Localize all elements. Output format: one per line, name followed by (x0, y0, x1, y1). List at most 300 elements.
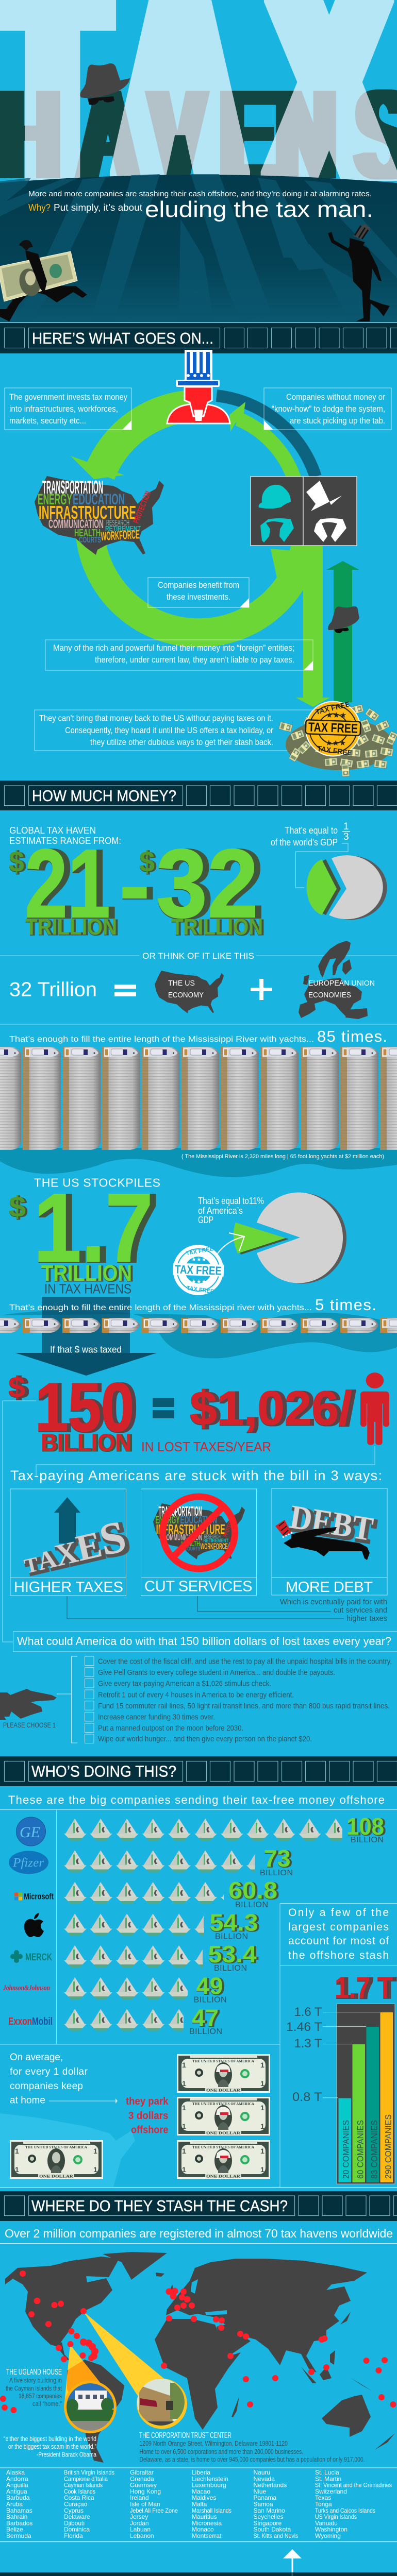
map: US infrastructure word cloud: RETIREMENT (105, 524, 141, 533)
map: small word cloud: INFRASTRUCTURE (156, 1522, 225, 1537)
bar chart: cash by number of companies: 83 COMPANIES (370, 2120, 379, 2179)
map: US economy (155, 971, 224, 1013)
text: 5 times yachts: 5 times. (315, 1296, 376, 1314)
text: 85 times yachts (9, 1027, 387, 1045)
column 3: Labuan (130, 2526, 151, 2533)
icon: Uncle Sam (167, 350, 230, 423)
column 6: Texas (315, 2494, 331, 2501)
icon: red person (360, 1372, 389, 1445)
text: three dollars offshore: offshore (131, 2125, 168, 2136)
text: one third of world GDP: That’s equal to (285, 825, 338, 836)
logo: Merck (10, 1950, 52, 1963)
dark green arrow: money going up (326, 561, 359, 702)
column 4: Mauritius (192, 2513, 217, 2520)
stamp: tax free white: TAX FREE (186, 1285, 214, 1295)
column 6 (315, 2469, 392, 2539)
map: European Union (299, 941, 375, 1019)
intro text: Why? (28, 202, 51, 213)
map: small word cloud: PROTECTION (222, 1513, 237, 1538)
column 6: Wyoming (315, 2532, 341, 2539)
bar chart: cash by number of companies: 290 COMPANIES (384, 2114, 393, 2179)
text: one dollar at home (10, 2052, 88, 2106)
text: three dollars offshore: they park (126, 2096, 169, 2107)
logo: ExxonMobil: ExxonMobil (8, 2016, 53, 2027)
text: few largest companies: Only a few of the (288, 1907, 389, 1919)
text: Corporation Trust Center: 1209 North Orange Street, Wilmington, Delaware 19801-1120 (139, 2439, 288, 2447)
text: one dollar at home: for every 1 dollar (10, 2066, 88, 2077)
text: 11 percent (198, 1196, 264, 1225)
checklist: Wipe out world hunger... and then give every person on the planet $20. (98, 1735, 312, 1743)
row: Merck (64, 1945, 259, 1971)
heading: HERE’S WHAT GOES ON... (32, 329, 213, 347)
map: US infrastructure word cloud: ENERGY (38, 491, 72, 508)
note: Mississippi assumptions: ( The Mississippi River is 2,320 miles long | 65 foot long yachts at $2 million each) (181, 1154, 384, 1160)
list: tax havens (6, 2469, 392, 2539)
map: US infrastructure word cloud (35, 476, 164, 555)
water band lower (0, 1311, 397, 1359)
equals sign (114, 985, 136, 996)
quote: Obama: “either the biggest building in the world (4, 2435, 96, 2443)
column 2: Costa Rica (64, 2494, 94, 2501)
question box: What could America do with that 150 billion dollars of lost taxes every year? (17, 1635, 391, 1648)
row: ExxonMobil (64, 2009, 222, 2034)
note: eventually paid for (67, 1596, 387, 1623)
logo: Merck: MERCK (25, 1952, 52, 1963)
company logos (3, 1817, 54, 2027)
callout: government invests (5, 388, 131, 430)
column 5: Samoa (254, 2501, 273, 2508)
row: GE: BILLION (351, 1836, 384, 1844)
logo: GE: GE (20, 1824, 40, 1841)
bar chart: cash by number of companies: 20 COMPANIES (341, 2120, 351, 2179)
panel: more debt: DEBT (287, 1498, 376, 1548)
note: eventually paid for: cut services and (334, 1606, 387, 1615)
column 6: Switzerland (315, 2488, 347, 2495)
green ring: companies benefit (90, 512, 323, 633)
connector lines (3, 1401, 375, 1642)
logo: GE (16, 1817, 45, 1846)
column 4: Maldives (192, 2494, 216, 2501)
subheading: big companies: These are the big companies sending their tax-free money offshore (8, 1793, 385, 1806)
text: three dollars offshore: 3 dollars (128, 2110, 168, 2122)
checklist (85, 1656, 392, 1743)
bar chart: cash by number of companies (286, 1971, 395, 2184)
panel: higher taxes: TAXES (18, 1511, 130, 1584)
panel: cut services (141, 1489, 257, 1596)
big number: 21 to 32 trillion: TRILLION (25, 914, 117, 940)
logo: Pfizer (9, 1851, 48, 1874)
illustration: columns of yachts (0, 1047, 397, 1150)
intro text: Put simply, it’s about (54, 202, 142, 213)
column 6: St. Lucia (315, 2469, 339, 2476)
big number: 150 billion per person: $1,026/ (190, 1381, 352, 1435)
icon: prohibited sign (163, 1497, 235, 1569)
text: 5 times yachts: That’s enough to fill the entire length of the Mississippi river with yachts... (9, 1303, 312, 1312)
column 2: Delaware (64, 2513, 90, 2520)
panel: higher taxes (10, 1489, 130, 1596)
stamp: tax free yellow (305, 700, 361, 757)
row: Pfizer: BILLION (260, 1869, 293, 1877)
callout: rich and powerful: therefore, under current law, they aren’t liable to pay taxes. (95, 655, 294, 665)
text: one dollar at home: On average, (10, 2052, 63, 2063)
text: few largest companies: the offshore stash (288, 1950, 389, 1961)
stamp: tax free yellow: ★★★ (325, 739, 346, 748)
column 3: Lebanon (130, 2532, 154, 2539)
text: one third of world GDP (271, 821, 350, 888)
bar chart: cash by number of companies: 60 COMPANIES (356, 2120, 366, 2179)
big number: 150 billion per person: $ (8, 1371, 25, 1404)
section banner: here's what goes on (0, 323, 397, 353)
column 5: St. Kitts and Nevis (254, 2532, 298, 2539)
continents (5, 2252, 395, 2463)
map: US economy: ECONOMY (168, 991, 204, 999)
icon: hard hat (259, 485, 291, 509)
text: one third of world GDP: of the world’s GDP (271, 837, 338, 848)
quote: Obama: or the biggest tax scam in the world.” (8, 2443, 96, 2450)
callout: government invests: The government invests tax money (9, 392, 127, 402)
text: global estimates: ESTIMATES RANGE FROM: (9, 836, 121, 846)
column 5: San Marino (254, 2507, 285, 2514)
column 1: Barbados (6, 2519, 32, 2527)
text: few largest companies: largest companies (288, 1921, 389, 1933)
map: US infrastructure word cloud: EDUCATION (73, 491, 125, 508)
logo: Pfizer: Pfizer (12, 1856, 44, 1870)
column 6: Tonga (315, 2501, 332, 2508)
intro text: More and more companies are stashing their cash offshore, and they’re doing it at alarming rates. (28, 190, 372, 198)
column 5: Niue (254, 2488, 267, 2495)
column 4: Micronesia (192, 2519, 222, 2527)
big number: 150 billion per person: IN LOST TAXES/YEAR (141, 1439, 271, 1454)
column 4 (192, 2469, 231, 2539)
label: please choose (3, 1656, 77, 1743)
equals sign (153, 1398, 174, 1418)
text: Ugland House: THE UGLAND HOUSE (6, 2368, 62, 2377)
section banner: how do they do it (0, 2572, 397, 2576)
column 1: Aruba (6, 2501, 23, 2508)
arrow: pick a haven points above (230, 2549, 302, 2576)
map: US infrastructure word cloud: PROTECTION (132, 490, 153, 524)
row: GE: 108 (346, 1813, 384, 1840)
big number: 1.7 trillion: TRILLION (41, 1261, 132, 1286)
panel: cut services: CUT SERVICES (144, 1579, 253, 1595)
bar chart: cash by number of companies: 0.8 T (292, 2090, 322, 2104)
map: world with tax havens (0, 2252, 396, 2463)
illustration: three offshore dollars (177, 2054, 270, 2179)
callout: hoard money (35, 710, 313, 751)
text: Ugland House: A five story building in (9, 2377, 62, 2384)
icon: worker collar (260, 518, 294, 543)
map: small word cloud: RETIREMENT (203, 1538, 228, 1544)
stamp: tax free white: TAX FREE (175, 1262, 222, 1278)
column 6: St. Martin (315, 2475, 341, 2482)
text: the US stockpiles: THE US STOCKPILES (34, 1176, 160, 1189)
column 4: Liechtenstein (192, 2475, 228, 2482)
subheading: over 2 million: Over 2 million companies are registered in almost 70 tax havens worldwide (5, 2227, 393, 2240)
stamp: tax free white: TAX FREE (186, 1246, 214, 1257)
column 1: Belize (6, 2526, 23, 2533)
pie chart: 11 percent of GDP (234, 1192, 346, 1284)
equation: 32 trillion equals US plus EU (9, 941, 375, 1019)
hero: headline TAX HAVENS (0, 0, 397, 323)
row: Merck: 53.4 (208, 1941, 257, 1968)
water band upper (0, 1148, 397, 1177)
map: US infrastructure word cloud: HEALTH (74, 528, 101, 539)
plus sign (251, 979, 272, 1000)
green arrow: government invests (71, 406, 192, 479)
intro text (28, 190, 373, 222)
column 5: Panama (254, 2494, 277, 2501)
row: Apple (64, 1913, 259, 1939)
icon: pointing hand (0, 1689, 57, 1720)
column 2: Djibouti (64, 2519, 85, 2527)
pie chart: one third (307, 855, 387, 920)
map: European Union: EUROPEAN UNION (308, 979, 375, 988)
column 3 (130, 2469, 178, 2539)
column 3: Guernsey (130, 2482, 157, 2489)
map: small word cloud: EDUCATION (180, 1514, 217, 1526)
column 1: Antigua (6, 2488, 27, 2495)
column 4: Liberia (192, 2469, 210, 2476)
callout: rich and powerful: Many of the rich and powerful funnel their money into “foreign” entities; (53, 643, 294, 653)
column 3: Jordan (130, 2519, 149, 2527)
callout: hoard money: Consequently, they hoard it until the US offers a tax holiday, or (65, 725, 273, 735)
logo: Microsoft: Microsoft (24, 1892, 54, 1902)
green arrow: money funnel down (296, 546, 330, 707)
text: global estimates (9, 825, 121, 846)
big number: 21 to 32 trillion: 21 (25, 829, 110, 938)
section banner: how much money (0, 781, 397, 810)
text: one third of world GDP: 1 (343, 821, 349, 832)
logo: Apple (24, 1913, 44, 1937)
checklist: Put a manned outpost on the moon before 2030. (98, 1724, 243, 1733)
callout: Corporation Trust Center (85, 2313, 187, 2429)
text: one dollar at home: at home (10, 2095, 45, 2106)
big number: 21 to 32 trillion: $ (9, 845, 24, 878)
illustration: yacht row (0, 1318, 397, 1333)
panel: more debt: MORE DEBT (286, 1579, 373, 1596)
column 6: Vanuatu (315, 2519, 338, 2527)
column 5: Singapore (254, 2519, 282, 2527)
chart: dollar boats by company (64, 1813, 384, 2036)
equation: 32 trillion equals US plus EU: 32 Trillion (9, 979, 97, 1001)
icon: white collar (314, 518, 346, 542)
dark back arc (80, 396, 316, 515)
big number: 150 billion per person: 150 (35, 1369, 134, 1446)
column 4: Marshall Islands (192, 2507, 231, 2514)
bar chart: cash by number of companies: 1.6 T (294, 2005, 322, 2019)
column 6: Turks and Caicos Islands (315, 2507, 375, 2514)
heading: HOW MUCH MONEY? (32, 787, 176, 805)
intro text: eluding the tax man. (145, 197, 373, 222)
heading: WHERE DO THEY STASH THE CASH? (31, 2197, 288, 2215)
quote: Obama (4, 2435, 97, 2459)
column 1: Alaska (6, 2469, 25, 2476)
callout: hoard money: they utilize other dubious ways to get their stash back. (90, 737, 273, 747)
row: Johnson and Johnson (64, 1977, 226, 2002)
column 3: Isle of Man (130, 2501, 160, 2508)
map: small word cloud: WORKFORCE (201, 1541, 228, 1551)
inner seas (191, 2279, 227, 2315)
big number: 21 to 32 trillion: 32 (156, 829, 258, 938)
column 4: Montserrat (192, 2532, 222, 2539)
callout: hoard money: They can’t bring that money back to the US without paying taxes on it. (39, 713, 273, 723)
text: few largest companies: account for most of (288, 1935, 389, 1947)
big number: 1.7 trillion: IN TAX HAVENS (44, 1281, 131, 1297)
big number: 21 to 32 trillion: TRILLION (171, 914, 263, 940)
bar chart: cash by number of companies: 1.3 T (294, 2037, 322, 2050)
row: Apple: BILLION (215, 1932, 248, 1941)
column 1: Bahrain (6, 2513, 27, 2520)
row: Microsoft (64, 1882, 278, 1907)
callout: companies benefit (148, 578, 249, 607)
column 5: Netherlands (254, 2482, 287, 2489)
checklist: Give Pell Grants to every college student in America... and double the payouts. (98, 1668, 335, 1677)
map: US economy: THE US (168, 979, 195, 988)
note: eventually paid for: Which is eventually paid for with (280, 1598, 387, 1606)
icon: top hat (306, 481, 342, 511)
ghost map behind bills (0, 2113, 135, 2187)
big number: 21 to 32 trillion: - (119, 830, 151, 939)
note: eventually paid for: higher taxes (346, 1614, 387, 1623)
column 3: Jebel Ali Free Zone (130, 2507, 178, 2514)
text: Ugland House: 18,857 companies (19, 2392, 62, 2400)
row: ExxonMobil: 47 (192, 2004, 219, 2031)
diagram: the tax cycle (5, 350, 397, 777)
column 1: Bermuda (6, 2532, 31, 2539)
callout: companies without money: Companies without money or (286, 392, 385, 402)
text: one third of world GDP: 3 (343, 832, 349, 842)
text: 11 percent: That’s equal to11% (198, 1196, 264, 1206)
stamp: tax free white (173, 1245, 224, 1295)
map: small word cloud: TRANSPORTATION (159, 1504, 202, 1519)
stamp: tax free white: ★★★ (191, 1279, 207, 1285)
section banner: where do they stash the cash (0, 2191, 397, 2221)
map: small word cloud: COURTS (185, 1546, 201, 1552)
row: Pfizer (64, 1850, 292, 1875)
row: Johnson and Johnson: BILLION (194, 1996, 227, 2005)
stamp: tax free yellow: TAX FREE (308, 720, 358, 736)
callout: government invests: into infrastructures, workforces, (9, 404, 118, 414)
big number: 150 billion per person (8, 1369, 352, 1456)
text: Ugland House: call “home.” (32, 2400, 62, 2408)
text: one dollar at home: companies keep (10, 2081, 83, 2092)
column 4: Macao (192, 2488, 210, 2495)
column 2 (64, 2469, 114, 2539)
row: GE (64, 1818, 386, 1842)
logo: Microsoft (14, 1892, 54, 1902)
big number: 150 billion per person: BILLION (41, 1429, 131, 1456)
row: Microsoft: BILLION (235, 1901, 268, 1909)
ground with letter reflections (0, 174, 397, 323)
checklist: Retrofit 1 out of every 4 houses in America to be energy efficient. (98, 1690, 294, 1699)
illustration: Uncle Sam silhouette (328, 224, 390, 321)
column 4: Malta (192, 2501, 207, 2508)
checklist: Give every tax-paying American a $1,026 stimulus check. (98, 1680, 271, 1688)
map: European Union: ECONOMIES (308, 991, 351, 999)
column 2: Curaçao (64, 2501, 88, 2508)
text: Ugland House (6, 2368, 62, 2408)
row: Microsoft: 60.8 (228, 1877, 277, 1904)
map: US infrastructure word cloud: WORKFORCE (101, 528, 140, 544)
column 2: Campione d’Italia (64, 2475, 108, 2482)
green arrow: companies pay (229, 402, 296, 484)
map: small word cloud: HEALTH (181, 1540, 200, 1548)
illustration: dollar at home (10, 2140, 103, 2179)
big number: 1.7 trillion: $ (9, 1191, 26, 1224)
text: stuck with the bill: Tax-paying Americans are stuck with the bill in 3 ways: (10, 1468, 382, 1483)
callout: rich and powerful (45, 640, 313, 670)
column 1: Andorra (6, 2475, 28, 2482)
column 5: South Dakota (254, 2526, 291, 2533)
column 4: Luxembourg (192, 2482, 226, 2489)
row: Merck: BILLION (214, 1964, 247, 1973)
row: Pfizer: 73 (264, 1845, 291, 1872)
heading: WHO’S DOING THIS? (31, 1762, 176, 1781)
big number: 1.7 trillion: 1.7 (34, 1174, 153, 1282)
column 3: Gibraltar (130, 2469, 154, 2476)
column 5: Nauru (254, 2469, 270, 2476)
text: Ugland House: the Cayman Islands that (6, 2384, 62, 2392)
big number: 21 to 32 trillion (9, 829, 263, 940)
map: small word cloud: ENERGY (155, 1514, 180, 1526)
arrow: home to offshore (49, 2098, 118, 2104)
column 3: Grenada (130, 2475, 154, 2482)
text: 5 times yachts (9, 1296, 376, 1314)
text: three dollars offshore (126, 2096, 169, 2136)
stamp: tax free yellow: TAX FREE (317, 744, 353, 757)
question box (13, 1632, 397, 1652)
callout: companies without money: are stuck picking up the tab. (290, 416, 385, 426)
icon: spy hat (328, 606, 359, 633)
column 3: Ireland (130, 2494, 149, 2501)
column 6: US Virgin Islands (315, 2513, 357, 2520)
map: small word cloud (153, 1503, 245, 1560)
column 4: Monaco (192, 2526, 214, 2533)
column 1 (6, 2469, 32, 2539)
text: Corporation Trust Center: Home to over 6,500 corporations and more than 200,000 businesses. (139, 2448, 303, 2455)
arrow: curved white (218, 1233, 244, 1253)
stamp: tax free yellow: TAX FREE (315, 700, 351, 716)
callout: companies benefit: Companies benefit from (158, 580, 239, 590)
icon: money pile (279, 703, 397, 777)
illustration: Uncle Sam under debt (275, 1520, 370, 1560)
map: US infrastructure word cloud: TRANSPORTATION (42, 477, 103, 498)
callout: companies benefit: these investments. (167, 592, 230, 602)
big number: 21 to 32 trillion: $ (139, 845, 155, 878)
illustration: man running with bill (0, 240, 87, 321)
photo: Corporation Trust Center (137, 2379, 185, 2426)
text: 85 times yachts: That’s enough to fill the entire length of the Mississippi River with yachts... (9, 1035, 314, 1044)
text: Corporation Trust Center: THE CORPORATION TRUST CENTER (139, 2431, 231, 2440)
photo: Ugland House (64, 2383, 116, 2431)
callout: government invests: markets, security etc... (9, 416, 86, 426)
text: if that was taxed: If that $ was taxed (50, 1345, 122, 1355)
column 1: Anguilla (6, 2482, 28, 2489)
panel: companies icons (251, 477, 357, 546)
callout: companies without money (264, 388, 391, 430)
checklist: Increase cancer funding 30 times over. (98, 1713, 215, 1722)
map: small word cloud: RESEARCH (204, 1534, 221, 1540)
column 2: Cyprus (64, 2507, 84, 2514)
column 5 (254, 2469, 298, 2539)
label: please choose: PLEASE CHOOSE 1 (3, 1721, 56, 1729)
text: 85 times yachts: 85 times. (317, 1027, 387, 1045)
icon: spy hat and glasses (80, 63, 130, 105)
stamp: tax free white: ★★★ (191, 1257, 207, 1263)
panel: higher taxes: HIGHER TAXES (14, 1579, 123, 1596)
map: small word cloud: COMMUNICATION (163, 1533, 202, 1543)
column 6: Washington (315, 2526, 348, 2533)
